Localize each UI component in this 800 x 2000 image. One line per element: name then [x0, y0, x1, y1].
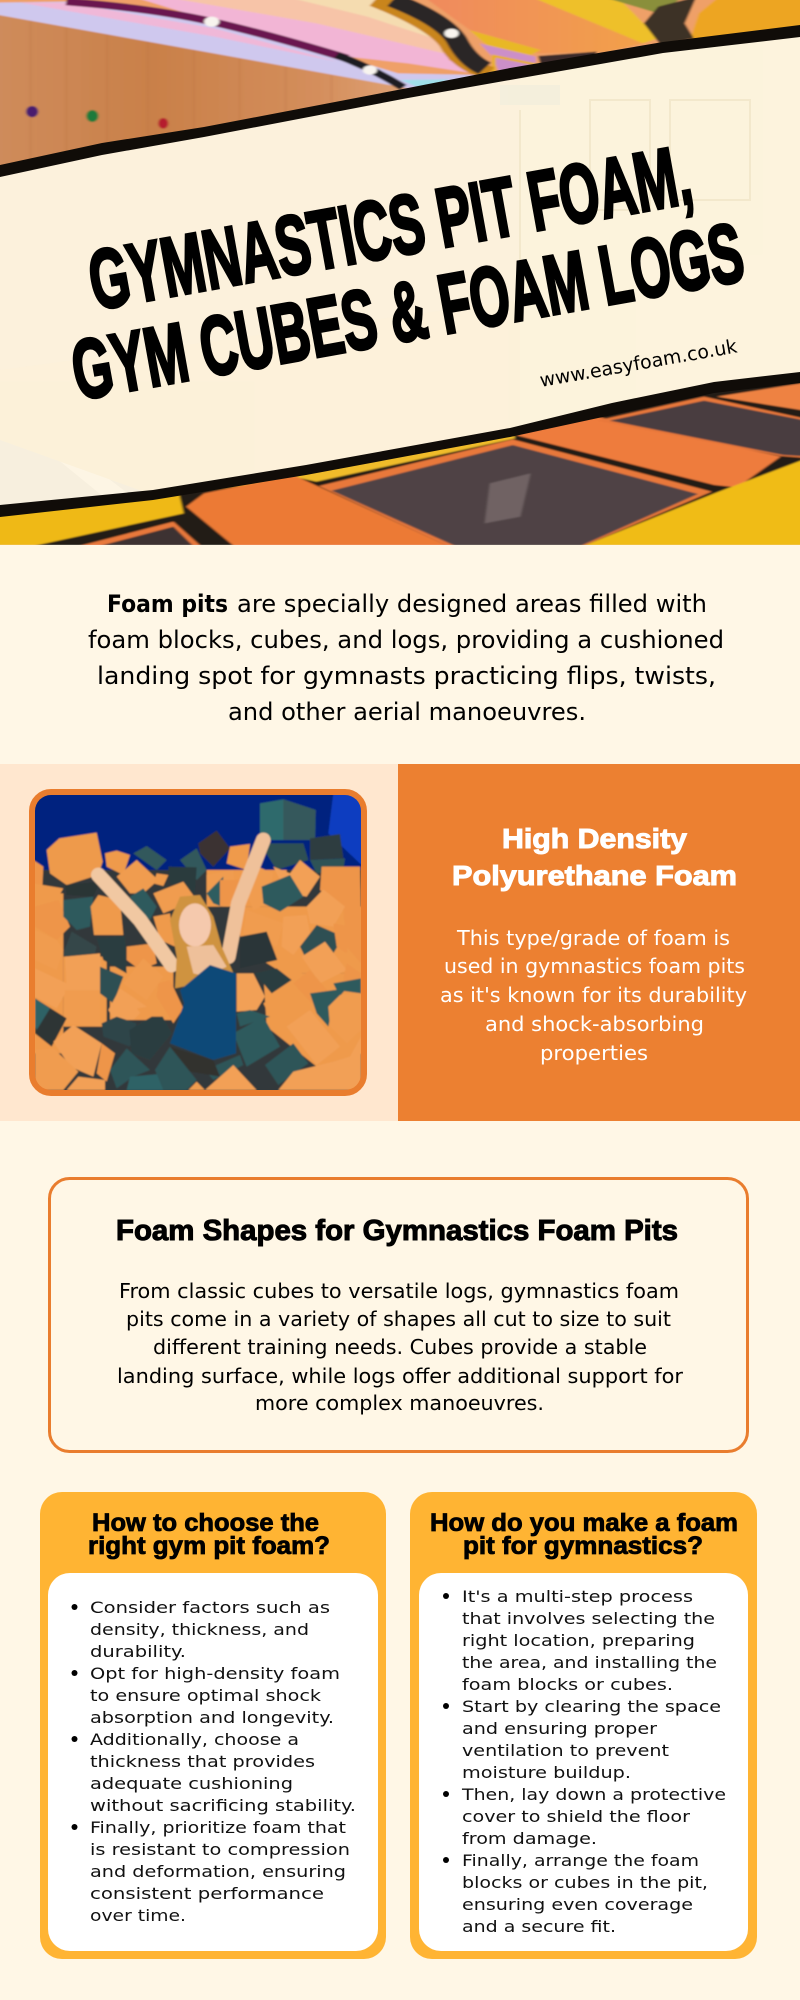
band top black edge	[0, 25, 800, 177]
panel: how to choose	[40, 1492, 386, 1959]
bullet list: choosing tips: thickness that provides	[90, 1752, 315, 1771]
heading: high density polyurethane foam: Polyurethane Foam	[452, 860, 737, 891]
text: foam shapes description: pits come in a variety of shapes all cut to size to suit	[126, 1307, 671, 1331]
bullet list: making steps	[443, 1587, 726, 1936]
bullet list: making steps: moisture buildup.	[462, 1763, 631, 1782]
hero banner	[0, 0, 800, 556]
bullet list: making steps: cover to shield the floor	[462, 1807, 690, 1826]
bullet list: choosing tips: over time.	[90, 1906, 186, 1925]
bullet list: choosing tips: is resistant to compression	[90, 1840, 350, 1859]
photo: gymnast in foam pit	[32, 792, 364, 1093]
bullet list: choosing tips: consistent performance	[90, 1884, 324, 1903]
heading: high density polyurethane foam: High Density	[502, 823, 687, 854]
cream title band	[0, 31, 800, 511]
text: foam shapes description: landing surface, while logs offer additional support for	[117, 1364, 684, 1388]
hero photo: ceiling and wood wall	[0, 0, 800, 165]
text: foam shapes description	[117, 1279, 684, 1415]
woman	[98, 840, 263, 1077]
white list card	[48, 1573, 378, 1951]
underlying orange mass	[33, 893, 63, 1053]
text: foam description: This type/grade of foam is	[456, 926, 730, 950]
text: foam shapes description: different training needs. Cubes provide a stable	[153, 1335, 647, 1359]
bullet list: choosing tips: to ensure optimal shock	[90, 1686, 322, 1705]
bullet list: choosing tips: density, thickness, and	[90, 1620, 309, 1639]
text: foam description: and shock-absorbing	[485, 1012, 704, 1036]
hero photo: trampolines and pads	[0, 383, 800, 545]
intro paragraph: foam blocks, cubes, and logs, providing a cushioned	[88, 626, 724, 654]
heading: foam shapes: Foam Shapes for Gymnastics Foam Pits	[116, 1215, 678, 1247]
faint photo showing through band	[519, 99, 751, 260]
intro paragraph	[88, 590, 724, 726]
bullet list: making steps: and a secure fit.	[462, 1917, 616, 1936]
bullet list: making steps: Then, lay down a protective	[461, 1785, 726, 1804]
intro paragraph: and other aerial manoeuvres.	[228, 698, 586, 726]
bullet list: choosing tips: and deformation, ensuring	[90, 1862, 346, 1881]
panel: photo background	[0, 764, 398, 1121]
bullet list: choosing tips: durability.	[90, 1642, 186, 1661]
bullet list: choosing tips: Opt for high-density foam	[90, 1664, 340, 1683]
white list card	[419, 1573, 748, 1951]
bullet list: making steps: the area, and installing the	[462, 1653, 717, 1672]
bullet list: choosing tips: Finally, prioritize foam that	[90, 1818, 346, 1837]
bullet list: making steps: from damage.	[462, 1829, 597, 1848]
heading: how to choose	[88, 1509, 330, 1560]
bullet list: making steps: right location, preparing	[462, 1631, 695, 1650]
heading: how to make	[430, 1509, 738, 1560]
heading: how to choose: right gym pit foam?	[88, 1532, 330, 1560]
bullet list: choosing tips: adequate cushioning	[90, 1774, 293, 1793]
bullet list: choosing tips: absorption and longevity.	[90, 1708, 334, 1727]
bullet list: making steps: and ensuring proper	[462, 1719, 657, 1738]
bullet list: making steps: ensuring even coverage	[462, 1895, 693, 1914]
bullet list: choosing tips: Consider factors such as	[90, 1598, 330, 1617]
intro paragraph: Foam pits	[107, 590, 228, 618]
bullet list: making steps: Finally, arrange the foam	[462, 1851, 699, 1870]
bullet list: making steps: that involves selecting the	[462, 1609, 715, 1628]
bullet list: making steps: ventilation to prevent	[462, 1741, 669, 1760]
bullet list: choosing tips	[72, 1598, 356, 1925]
bullet list: making steps: It's a multi-step process	[462, 1587, 693, 1606]
bullet list: choosing tips: without sacrificing stability.	[90, 1796, 356, 1815]
panel: high density foam	[398, 764, 800, 1121]
text: foam description: properties	[540, 1041, 648, 1065]
bullet list: making steps: Start by clearing the space	[462, 1697, 721, 1716]
heading: how to make: pit for gymnastics?	[463, 1532, 703, 1560]
heading: high density polyurethane foam	[452, 823, 737, 891]
intro paragraph: are specially designed areas filled with	[237, 590, 707, 618]
text: foam shapes description: more complex manoeuvres.	[255, 1391, 544, 1415]
band bottom black edge	[0, 372, 800, 517]
panel: foam shapes	[50, 1178, 748, 1452]
text: foam description: used in gymnastics foam pits	[444, 954, 745, 978]
heading: how to make: How do you make a foam	[430, 1509, 738, 1537]
bullet list: making steps: blocks or cubes in the pit,	[462, 1873, 708, 1892]
intro paragraph: landing spot for gymnasts practicing flips, twists,	[97, 662, 716, 690]
website url: www.easyfoam.co.uk	[538, 336, 739, 392]
text: foam description: as it's known for its durability	[440, 983, 747, 1007]
bullet list: choosing tips: Additionally, choose a	[90, 1730, 299, 1749]
bullet list: making steps: foam blocks or cubes.	[462, 1675, 673, 1694]
text: foam description	[440, 926, 747, 1065]
panel: how to make	[410, 1492, 757, 1959]
text: foam shapes description: From classic cubes to versatile logs, gymnastics foam	[119, 1279, 679, 1303]
heading: how to choose: How to choose the	[92, 1509, 319, 1537]
